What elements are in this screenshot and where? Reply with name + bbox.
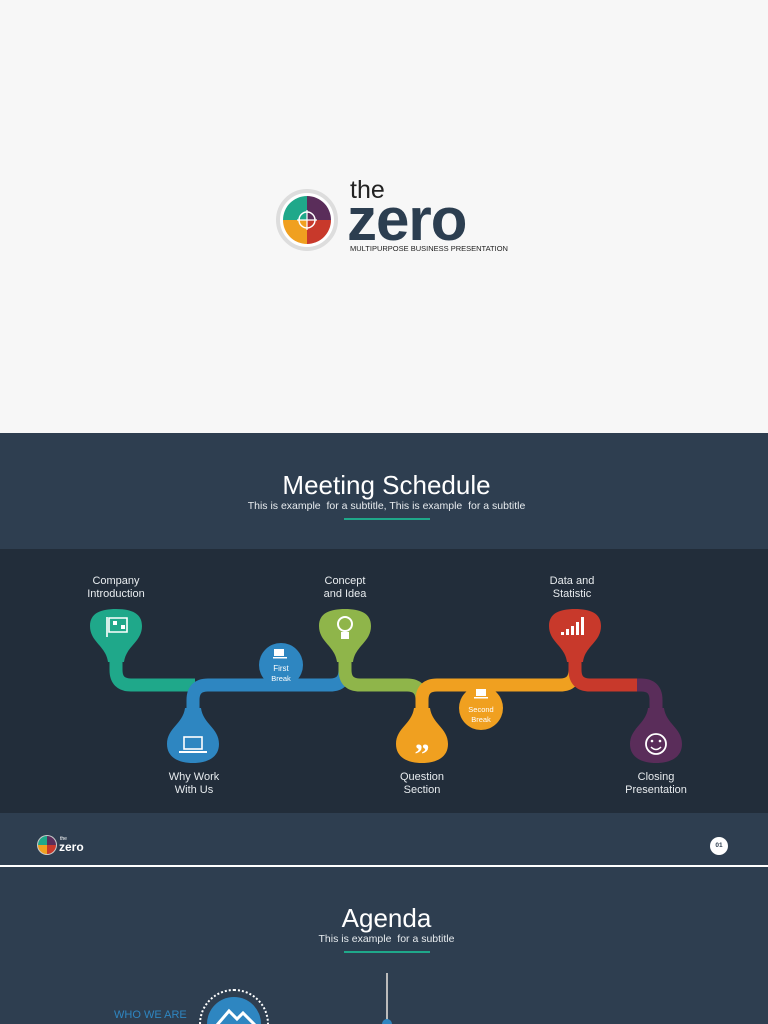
icon: chart pin bbox=[549, 609, 601, 662]
panel: timeline: Question bbox=[400, 771, 444, 783]
first break bbox=[259, 643, 303, 687]
icon: mountain circle bbox=[199, 989, 269, 1024]
first break: First bbox=[273, 664, 290, 673]
panel: timeline: Concept bbox=[324, 575, 365, 587]
icon: smile pin bbox=[630, 708, 682, 763]
icon: quote pin: ” bbox=[414, 738, 430, 771]
icon: bulb pin bbox=[319, 609, 371, 662]
panel: timeline: and Idea bbox=[324, 588, 366, 600]
labels: Introduction bbox=[87, 588, 145, 600]
title: Meeting Schedule bbox=[282, 470, 491, 500]
panel: timeline: Section bbox=[404, 784, 440, 796]
icon: quote pin bbox=[396, 708, 448, 771]
icon: laptop pin bbox=[167, 708, 219, 763]
logo: zero bbox=[347, 186, 466, 253]
logo bbox=[276, 176, 508, 253]
logo: MULTIPURPOSE BUSINESS PRESENTATION bbox=[350, 244, 508, 253]
panel: timeline: Presentation bbox=[625, 784, 687, 796]
subtitle: This is example for a subtitle, This is example for a subtitle bbox=[248, 500, 525, 512]
page number: 01 bbox=[715, 842, 723, 849]
logo: the bbox=[350, 176, 385, 204]
labels bbox=[87, 575, 145, 600]
who we are: WHO WE ARE bbox=[114, 1009, 187, 1021]
footer logo bbox=[37, 835, 57, 855]
panel: timeline bbox=[0, 549, 768, 813]
second break: Break bbox=[471, 715, 491, 724]
second break bbox=[459, 686, 503, 730]
labels: Company bbox=[92, 575, 140, 587]
panel: timeline: Closing bbox=[638, 771, 674, 783]
first break: Break bbox=[271, 674, 291, 683]
agenda title: Agenda bbox=[342, 903, 431, 933]
panel: timeline: Data and bbox=[550, 575, 594, 587]
footer bbox=[0, 813, 768, 865]
panel: cover bbox=[0, 0, 768, 433]
page number bbox=[710, 837, 728, 855]
second break: Second bbox=[468, 705, 494, 714]
icon: flag pin bbox=[90, 609, 142, 662]
footer: the bbox=[60, 836, 67, 842]
footer: zero bbox=[59, 840, 84, 854]
panel: timeline: Why Work bbox=[169, 771, 219, 783]
panel: meeting schedule header bbox=[0, 433, 768, 549]
panel: agenda bbox=[0, 867, 768, 1024]
agenda subtitle: This is example for a subtitle bbox=[318, 933, 454, 945]
panel: timeline: With Us bbox=[175, 784, 213, 796]
panel: timeline: Statistic bbox=[553, 588, 591, 600]
